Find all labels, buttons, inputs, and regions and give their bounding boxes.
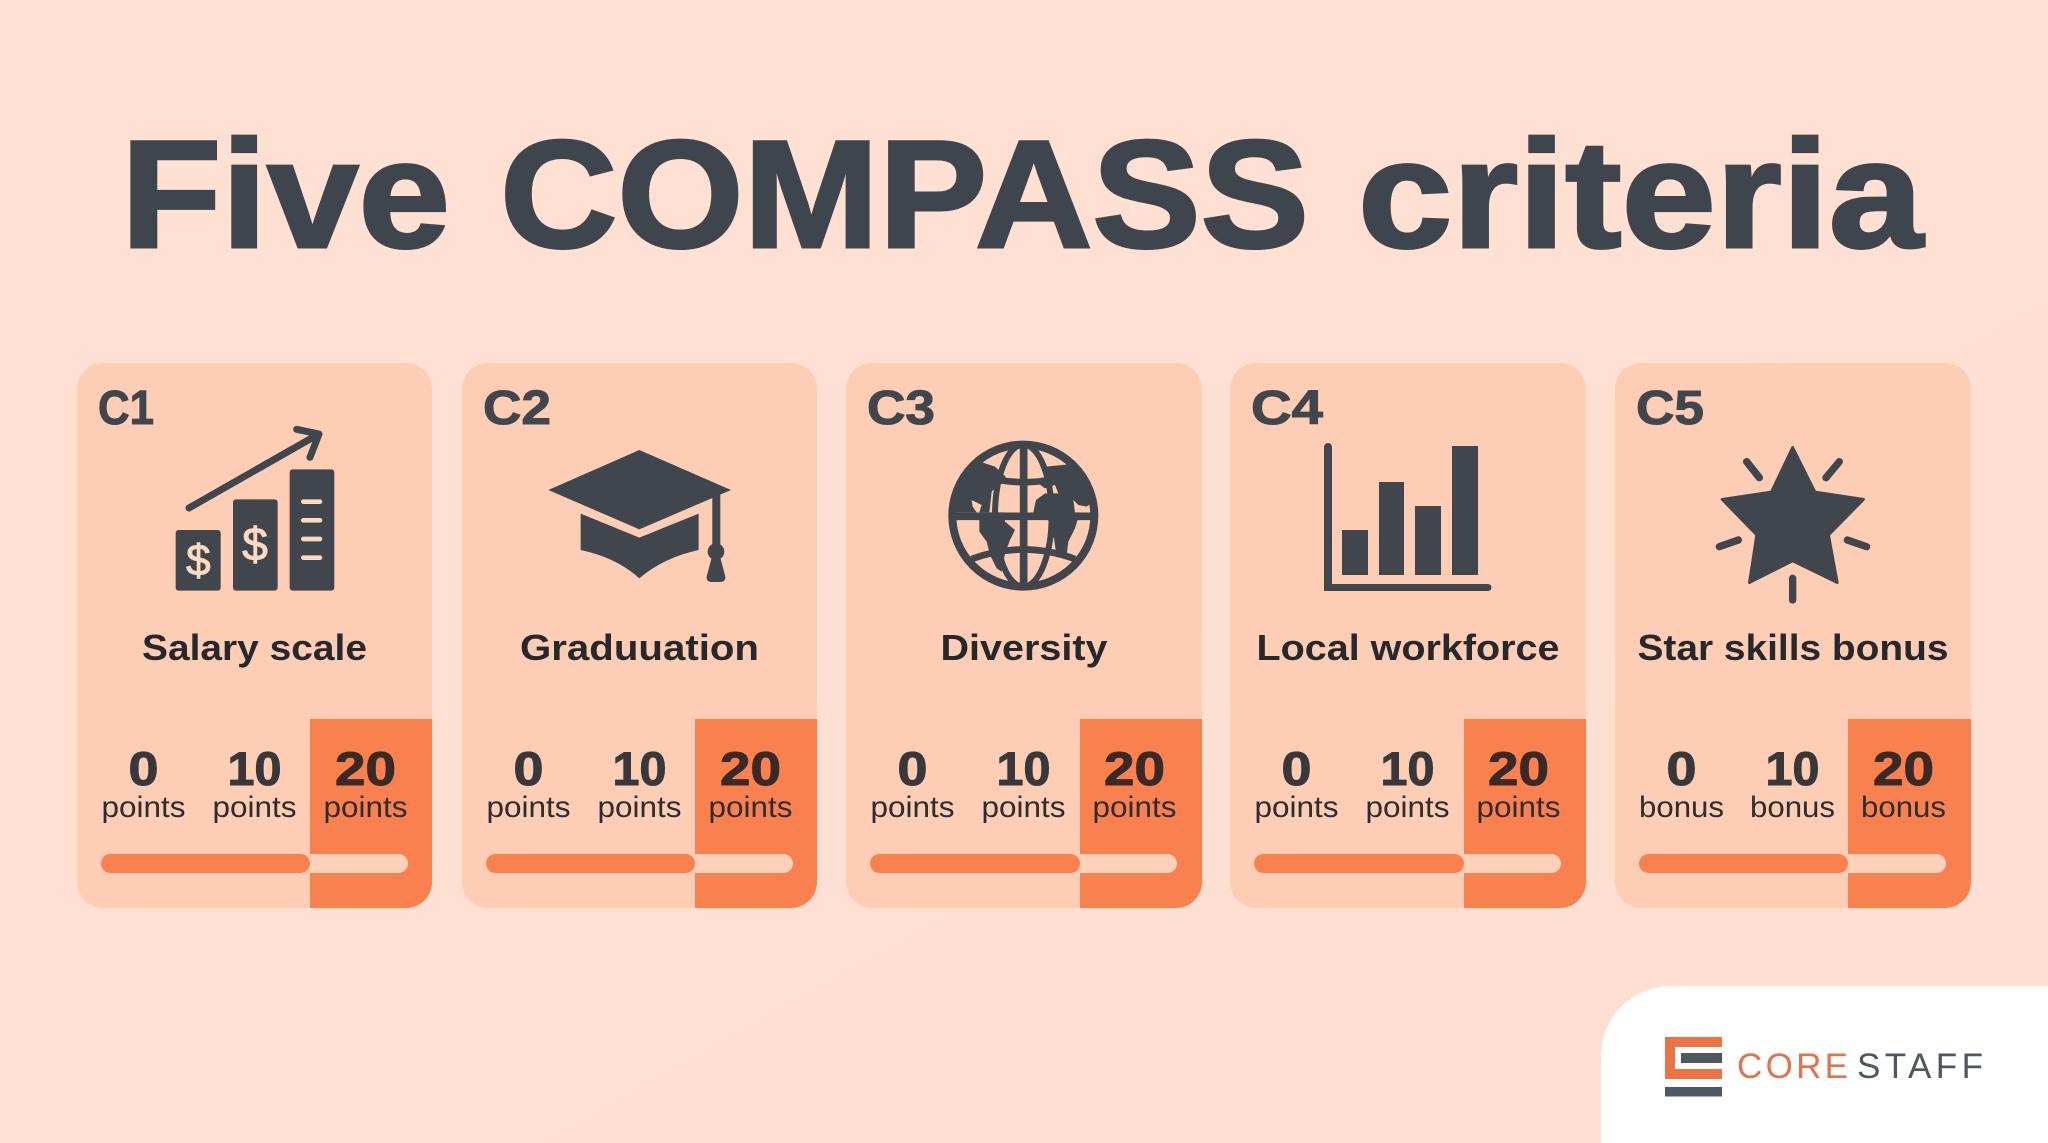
score options: points — [486, 791, 570, 824]
title: Five — [121, 109, 450, 280]
criterion name: Salary scale — [142, 627, 367, 668]
logo mark — [1665, 1037, 1722, 1096]
score options: 0 — [514, 742, 544, 795]
icon: rising salary bars: $ — [186, 536, 211, 585]
score options: 10 — [612, 742, 666, 795]
score options: 20 — [1104, 742, 1165, 795]
criterion name: Graduuation — [520, 627, 759, 668]
score options: bonus — [1750, 791, 1835, 824]
icon: bar chart — [1324, 443, 1492, 591]
progress bar — [486, 854, 793, 873]
title: criteria — [1358, 109, 1925, 280]
score options: 0 — [128, 742, 158, 795]
score options: points — [1366, 791, 1450, 824]
score options: bonus — [1861, 791, 1946, 824]
score options: 20 — [1488, 742, 1549, 795]
icon: rising salary bars — [176, 429, 334, 591]
score options: points — [870, 791, 954, 824]
icon: rising salary bars: $ — [242, 518, 268, 570]
score options: points — [982, 791, 1066, 824]
logo wordmark: STAFF — [1857, 1047, 1983, 1086]
criterion name: Star skills bonus — [1638, 627, 1948, 668]
card label C5: C5 — [1636, 382, 1704, 435]
score options: 10 — [1766, 742, 1820, 795]
score options: points — [1254, 791, 1338, 824]
score options: 10 — [1380, 742, 1434, 795]
criterion name: Local workforce — [1256, 627, 1560, 668]
criterion name: Diversity — [940, 627, 1108, 668]
logo wordmark — [1737, 1047, 1983, 1086]
score options: 10 — [996, 742, 1050, 795]
score options — [870, 742, 1176, 824]
progress bar — [1254, 854, 1561, 873]
score options — [1254, 742, 1560, 824]
score options: 20 — [1873, 742, 1934, 795]
icon: graduation cap — [548, 450, 731, 582]
icon: star with rays — [1719, 447, 1867, 600]
score options: points — [102, 791, 185, 824]
score options — [486, 742, 792, 824]
score options: 0 — [898, 742, 928, 795]
progress bar — [101, 854, 408, 873]
score options: 10 — [228, 742, 282, 795]
score options: 0 — [1282, 742, 1312, 795]
title: COMPASS — [500, 109, 1309, 280]
score options: points — [708, 791, 792, 824]
score options: points — [212, 791, 296, 824]
icon: globe — [950, 445, 1097, 587]
progress bar — [870, 854, 1177, 873]
card label C1: C1 — [98, 382, 154, 435]
card label C3: C3 — [867, 382, 935, 435]
panel: C5 star skills bonus — [1615, 363, 1971, 908]
score options: 20 — [720, 742, 781, 795]
score options: points — [1092, 791, 1176, 824]
score options: points — [598, 791, 682, 824]
score options: bonus — [1639, 791, 1724, 824]
score options — [1639, 742, 1946, 824]
card label C2: C2 — [483, 382, 551, 435]
panel: C1 salary scale — [77, 363, 432, 908]
score options: 20 — [335, 742, 396, 795]
card label C4: C4 — [1251, 382, 1323, 435]
score options: points — [324, 791, 408, 824]
logo wordmark: CORE — [1737, 1047, 1848, 1086]
score options — [102, 742, 408, 824]
progress bar — [1639, 854, 1946, 873]
score options: points — [1476, 791, 1560, 824]
panel: C4 local workforce — [1230, 363, 1586, 908]
panel: C2 graduation — [462, 363, 817, 908]
score options: 0 — [1666, 742, 1696, 795]
title — [121, 109, 1925, 280]
panel: C3 diversity — [846, 363, 1202, 908]
logo panel: CoreStaff — [1601, 986, 2048, 1143]
